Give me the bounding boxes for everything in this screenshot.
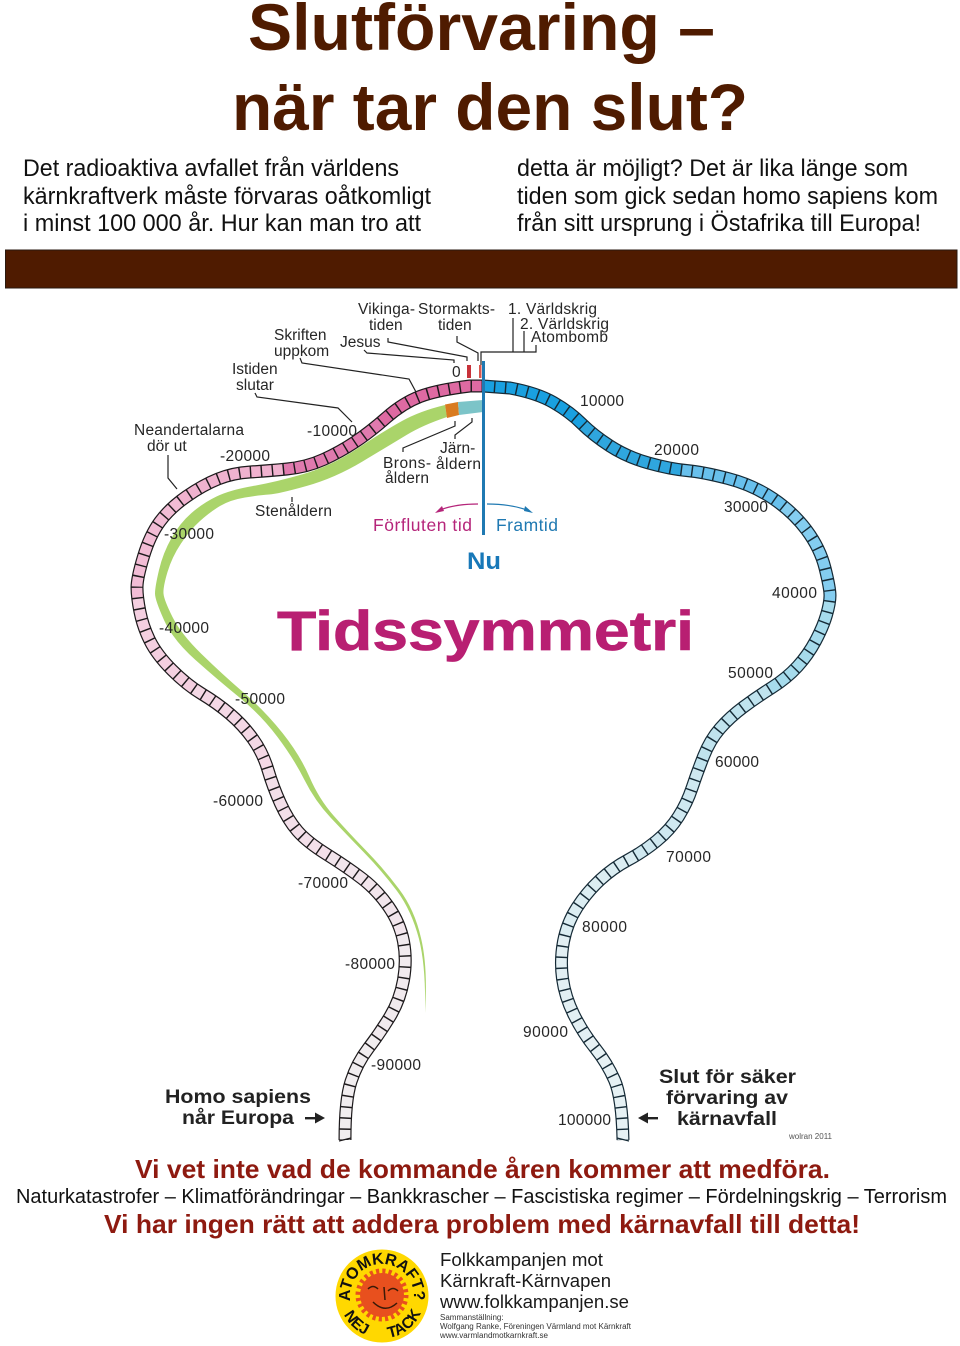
label: now: Nu: [467, 548, 501, 575]
year labels: future: 50000: [728, 665, 773, 682]
year labels: future: 70000: [666, 849, 711, 866]
compilation credit: [439, 1313, 632, 1340]
icon: smiling sun logo: NEJ: [344, 1310, 370, 1334]
list of risks: Naturkatastrofer – Klimatförändringar – Bankkrascher – Fascistiska regimer – Fördelningskrig – Terrorism: [16, 1186, 947, 1208]
event labels: uppkom: [274, 343, 329, 360]
year labels: past: -40000: [159, 620, 209, 637]
intro text: left column: [23, 155, 431, 237]
year labels: future: 40000: [772, 585, 817, 602]
callout: end of safe storage: kärnavfall: [677, 1109, 777, 1130]
callout: homo sapiens reaches Europe: Homo sapiens: [165, 1087, 311, 1108]
callout: homo sapiens reaches Europe: [165, 1087, 311, 1129]
year labels: future: 80000: [582, 919, 627, 936]
year labels: past: [159, 364, 461, 1074]
callout lines: [168, 318, 536, 502]
label: past time: Förfluten tid: [373, 515, 472, 535]
organisation name: Kärnkraft-Kärnvapen: [440, 1270, 611, 1291]
organisation name: www.folkkampanjen.se: [439, 1291, 629, 1312]
compilation credit: www.varmlandmotkarnkraft.se: [439, 1331, 549, 1340]
year labels: future: 100000: [558, 1112, 611, 1129]
timeline ribbon: past: [137, 386, 483, 1141]
closing statement 2: Vi har ingen rätt att addera problem med kärnavfall till detta!: [104, 1209, 860, 1239]
year labels: past: -50000: [235, 691, 285, 708]
arrow: to end of storage: [638, 1112, 658, 1124]
event labels: 1. Världskrig: [508, 301, 597, 318]
year labels: past: -90000: [371, 1057, 421, 1074]
year labels: future: 30000: [724, 499, 768, 516]
event labels: Jesus: [340, 334, 381, 351]
title: [232, 0, 748, 144]
label: future time: Framtid: [496, 515, 558, 535]
year labels: past: -80000: [345, 956, 395, 973]
iron age band: [458, 400, 483, 415]
arrow: to Europe: [305, 1112, 325, 1124]
event labels: tiden: [369, 317, 403, 334]
event labels: Atombomb: [531, 329, 608, 346]
year labels: future: [523, 393, 817, 1129]
event labels: Stormakts-: [418, 301, 495, 318]
year labels: future: 90000: [523, 1024, 568, 1041]
event labels: åldern: [436, 456, 481, 473]
year labels: past: -20000: [220, 448, 270, 465]
organisation name: Folkkampanjen mot: [440, 1249, 603, 1270]
event labels: [134, 301, 609, 520]
arrow: future: [487, 504, 533, 513]
year labels: past: -60000: [213, 793, 263, 810]
callout: homo sapiens reaches Europe: når Europa: [182, 1108, 294, 1129]
icon: smiling sun logo: TACK: [386, 1308, 421, 1338]
event labels: åldern: [385, 470, 429, 487]
year labels: past: -10000: [307, 423, 357, 440]
event labels: Istiden: [232, 361, 278, 378]
year labels: future: 20000: [654, 442, 699, 459]
arrow: past: [435, 504, 478, 513]
intro text: right column: från sitt ursprung i Östafrika till Europa!: [517, 210, 921, 237]
event labels: Skriften: [274, 327, 327, 344]
callout: end of safe storage: Slut för säker: [659, 1067, 797, 1088]
event labels: slutar: [236, 377, 274, 394]
compilation credit: Sammanställning:: [440, 1313, 504, 1322]
year labels: past: -70000: [298, 875, 348, 892]
event labels: Brons-: [383, 455, 431, 472]
event labels: Järn-: [440, 440, 475, 457]
intro text: right column: tiden som gick sedan homo sapiens kom: [517, 183, 938, 210]
event labels: tiden: [438, 317, 472, 334]
closing statement 1: Vi vet inte vad de kommande åren kommer att medföra.: [135, 1154, 830, 1184]
year labels: future: 60000: [715, 754, 759, 771]
green band: stone age: [155, 405, 447, 1013]
compilation credit: Wolfgang Ranke, Föreningen Värmland mot Kärnkraft: [440, 1322, 632, 1331]
intro text: right column: detta är möjligt? Det är lika länge som: [517, 155, 908, 182]
intro text: left column: kärnkraftverk måste förvaras oåtkomligt: [23, 183, 431, 210]
callout: end of safe storage: [659, 1067, 797, 1130]
credit: wolran 2011: [788, 1132, 833, 1141]
timeline ribbon: future: [483, 386, 830, 1141]
intro text: left column: Det radioaktiva avfallet från världens: [23, 155, 399, 182]
icon: smiling sun logo: ATOMKRAFT?: [339, 1252, 426, 1301]
title: när tar den slut?: [232, 70, 748, 144]
diagram heading: Tidssymmetri: [277, 599, 694, 662]
callout: end of safe storage: förvaring av: [666, 1088, 788, 1109]
event labels: Stenåldern: [255, 503, 332, 520]
bronze age band: [445, 402, 459, 418]
icon: smiling sun logo: [336, 1250, 428, 1342]
intro text: left column: i minst 100 000 år. Hur kan man tro att: [23, 210, 421, 237]
organisation name: [439, 1249, 629, 1312]
now line: [482, 361, 485, 535]
year labels: past: -30000: [164, 526, 214, 543]
year labels: future: 10000: [580, 393, 624, 410]
event labels: Vikinga-: [358, 301, 415, 318]
dark brown banner: [6, 250, 957, 288]
event labels: dör ut: [147, 438, 187, 455]
red event marks: [467, 365, 482, 378]
event labels: Neandertalarna: [134, 422, 244, 439]
year labels: past: 0: [452, 364, 461, 381]
event labels: 2. Världskrig: [520, 316, 609, 333]
intro text: right column: [517, 155, 938, 237]
